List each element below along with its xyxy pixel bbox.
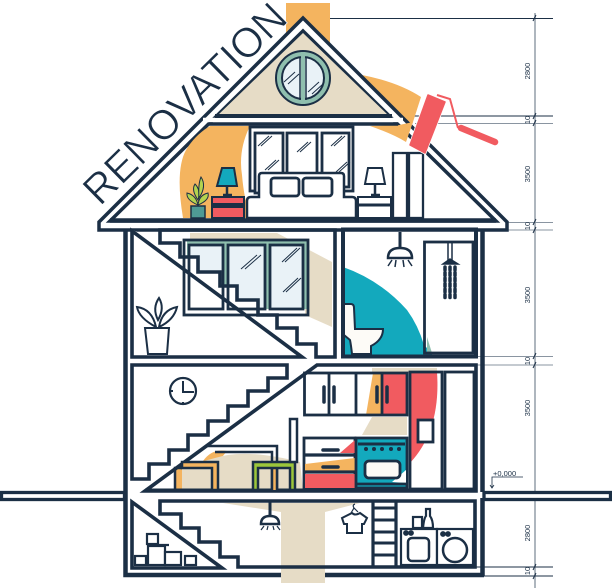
triangle under stairs — [132, 231, 302, 357]
orange paint stroke left — [180, 126, 251, 218]
dimension lines: 2800 — [523, 525, 532, 541]
left room frame with stairs — [132, 365, 287, 479]
kitchen frame — [145, 365, 476, 491]
dimension lines: 10 — [523, 116, 532, 124]
tall cupboards — [410, 372, 474, 489]
panel: basement — [132, 501, 475, 583]
dimension lines: 2800 — [523, 63, 532, 79]
icon: basement lamp — [261, 502, 280, 530]
icon: washing machines — [401, 509, 473, 565]
dimension lines: 10 — [523, 357, 532, 365]
ladder — [373, 502, 396, 567]
bed — [247, 173, 356, 218]
stairs — [160, 230, 335, 357]
panel: staircase room upper — [131, 229, 335, 357]
dimension lines: 3500 — [523, 400, 532, 416]
dimension lines: 3500 — [523, 287, 532, 303]
chimney — [286, 3, 330, 48]
icon: paint roller — [410, 95, 495, 153]
icon: ceiling lamp — [388, 232, 412, 267]
green chair — [253, 462, 295, 490]
orange paint stroke right remains — [370, 122, 413, 142]
plant in bedroom — [187, 177, 208, 218]
dimension lines: 3500 — [523, 166, 532, 182]
red nightstand with teal lamp — [212, 168, 244, 218]
icon: clock — [170, 378, 196, 404]
table outline — [207, 446, 277, 490]
icon: potted plant — [137, 298, 177, 354]
dining table and chairs — [175, 419, 297, 490]
attic room — [203, 33, 403, 124]
icon: shirt on hanger — [342, 504, 367, 533]
bedroom window — [250, 127, 353, 193]
dimension lines: 10 — [523, 222, 532, 230]
shower cabin — [424, 242, 473, 353]
kitchen cabinets — [304, 373, 407, 415]
stove — [356, 438, 407, 488]
panel: bathroom — [343, 230, 476, 356]
dimension lines: 10 — [523, 567, 532, 575]
icon: shower head — [443, 243, 458, 299]
window — [184, 240, 308, 315]
ground level marker — [490, 469, 523, 488]
right nightstand and lamp — [358, 168, 391, 218]
outer walls — [126, 230, 484, 576]
wardrobe — [393, 153, 423, 218]
orange paint stroke upper — [300, 70, 421, 142]
ground level marker: +0,000 — [493, 469, 516, 478]
icon: toilet — [344, 304, 383, 354]
attic floor — [110, 218, 496, 223]
panel: kitchen level backgrounds — [175, 368, 437, 490]
orange bench — [182, 462, 218, 490]
roof — [99, 18, 507, 230]
ground line — [2, 492, 610, 500]
boxes — [135, 534, 196, 565]
icon: round window — [276, 51, 330, 105]
kitchen drawers — [304, 438, 355, 488]
dimension lines — [330, 13, 553, 588]
